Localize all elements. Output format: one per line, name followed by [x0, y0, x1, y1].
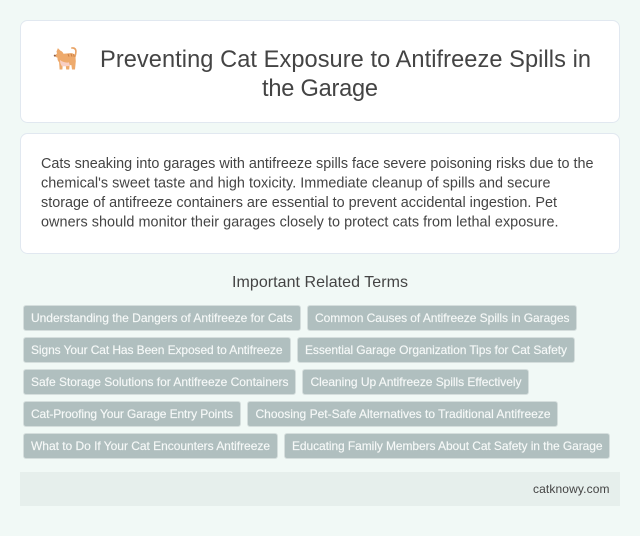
icon: orange cat: [54, 47, 77, 70]
tag: safe storage: Safe Storage Solutions for Antifreeze Containers: [31, 375, 288, 389]
tag: educating family: Educating Family Members About Cat Safety in the Garage: [292, 439, 603, 453]
tag: cleaning up spills: [302, 370, 528, 394]
tag: garage organization: [298, 338, 574, 362]
text block: summary paragraph: chemical's sweet taste and high toxicity. Immediate cleanup of spills and secure: [41, 176, 550, 192]
tag: garage organization: Essential Garage Organization Tips for Cat Safety: [305, 343, 567, 357]
panel: summary: [20, 134, 620, 254]
tag: understanding the dangers: [24, 306, 300, 330]
text block: summary paragraph: [41, 156, 594, 230]
title: Preventing Cat Exposure to Antifreeze Spills in: [100, 47, 591, 73]
tag: cat-proofing entry points: [24, 402, 240, 426]
tag: what to do: What to Do If Your Cat Encounters Antifreeze: [31, 439, 270, 453]
tag: cleaning up spills: Cleaning Up Antifreeze Spills Effectively: [310, 375, 522, 389]
tag: signs of exposure: [24, 338, 290, 362]
tag: educating family: [284, 434, 610, 458]
tag: pet-safe alternatives: Choosing Pet-Safe Alternatives to Traditional Antifreeze: [256, 407, 551, 421]
tag: cat-proofing entry points: Cat-Proofing Your Garage Entry Points: [31, 407, 233, 421]
text block: summary paragraph: storage of antifreeze containers are essential to prevent accidental ingestion. Pet: [41, 195, 557, 211]
text block: summary paragraph: Cats sneaking into garages with antifreeze spills face severe poisoning risks due to the: [41, 156, 594, 172]
panel: title card: [20, 20, 620, 122]
panel: related term tags: [24, 306, 610, 458]
tag: safe storage: [24, 370, 296, 394]
title: the Garage: [262, 76, 378, 102]
footer: site name: catknowy.com: [533, 482, 610, 496]
tag: common causes: [308, 306, 576, 330]
footer: [20, 472, 620, 506]
text block: summary paragraph: owners should monitor their garages closely to protect cats from lethal exposure.: [41, 214, 558, 230]
tag: common causes: Common Causes of Antifreeze Spills in Garages: [315, 311, 570, 325]
tag: understanding the dangers: Understanding the Dangers of Antifreeze for Cats: [31, 311, 292, 325]
tag: signs of exposure: Signs Your Cat Has Been Exposed to Antifreeze: [31, 343, 283, 357]
tag: what to do: [24, 434, 278, 458]
tag: pet-safe alternatives: [248, 402, 558, 426]
heading: important related terms: Important Related Terms: [232, 274, 408, 291]
